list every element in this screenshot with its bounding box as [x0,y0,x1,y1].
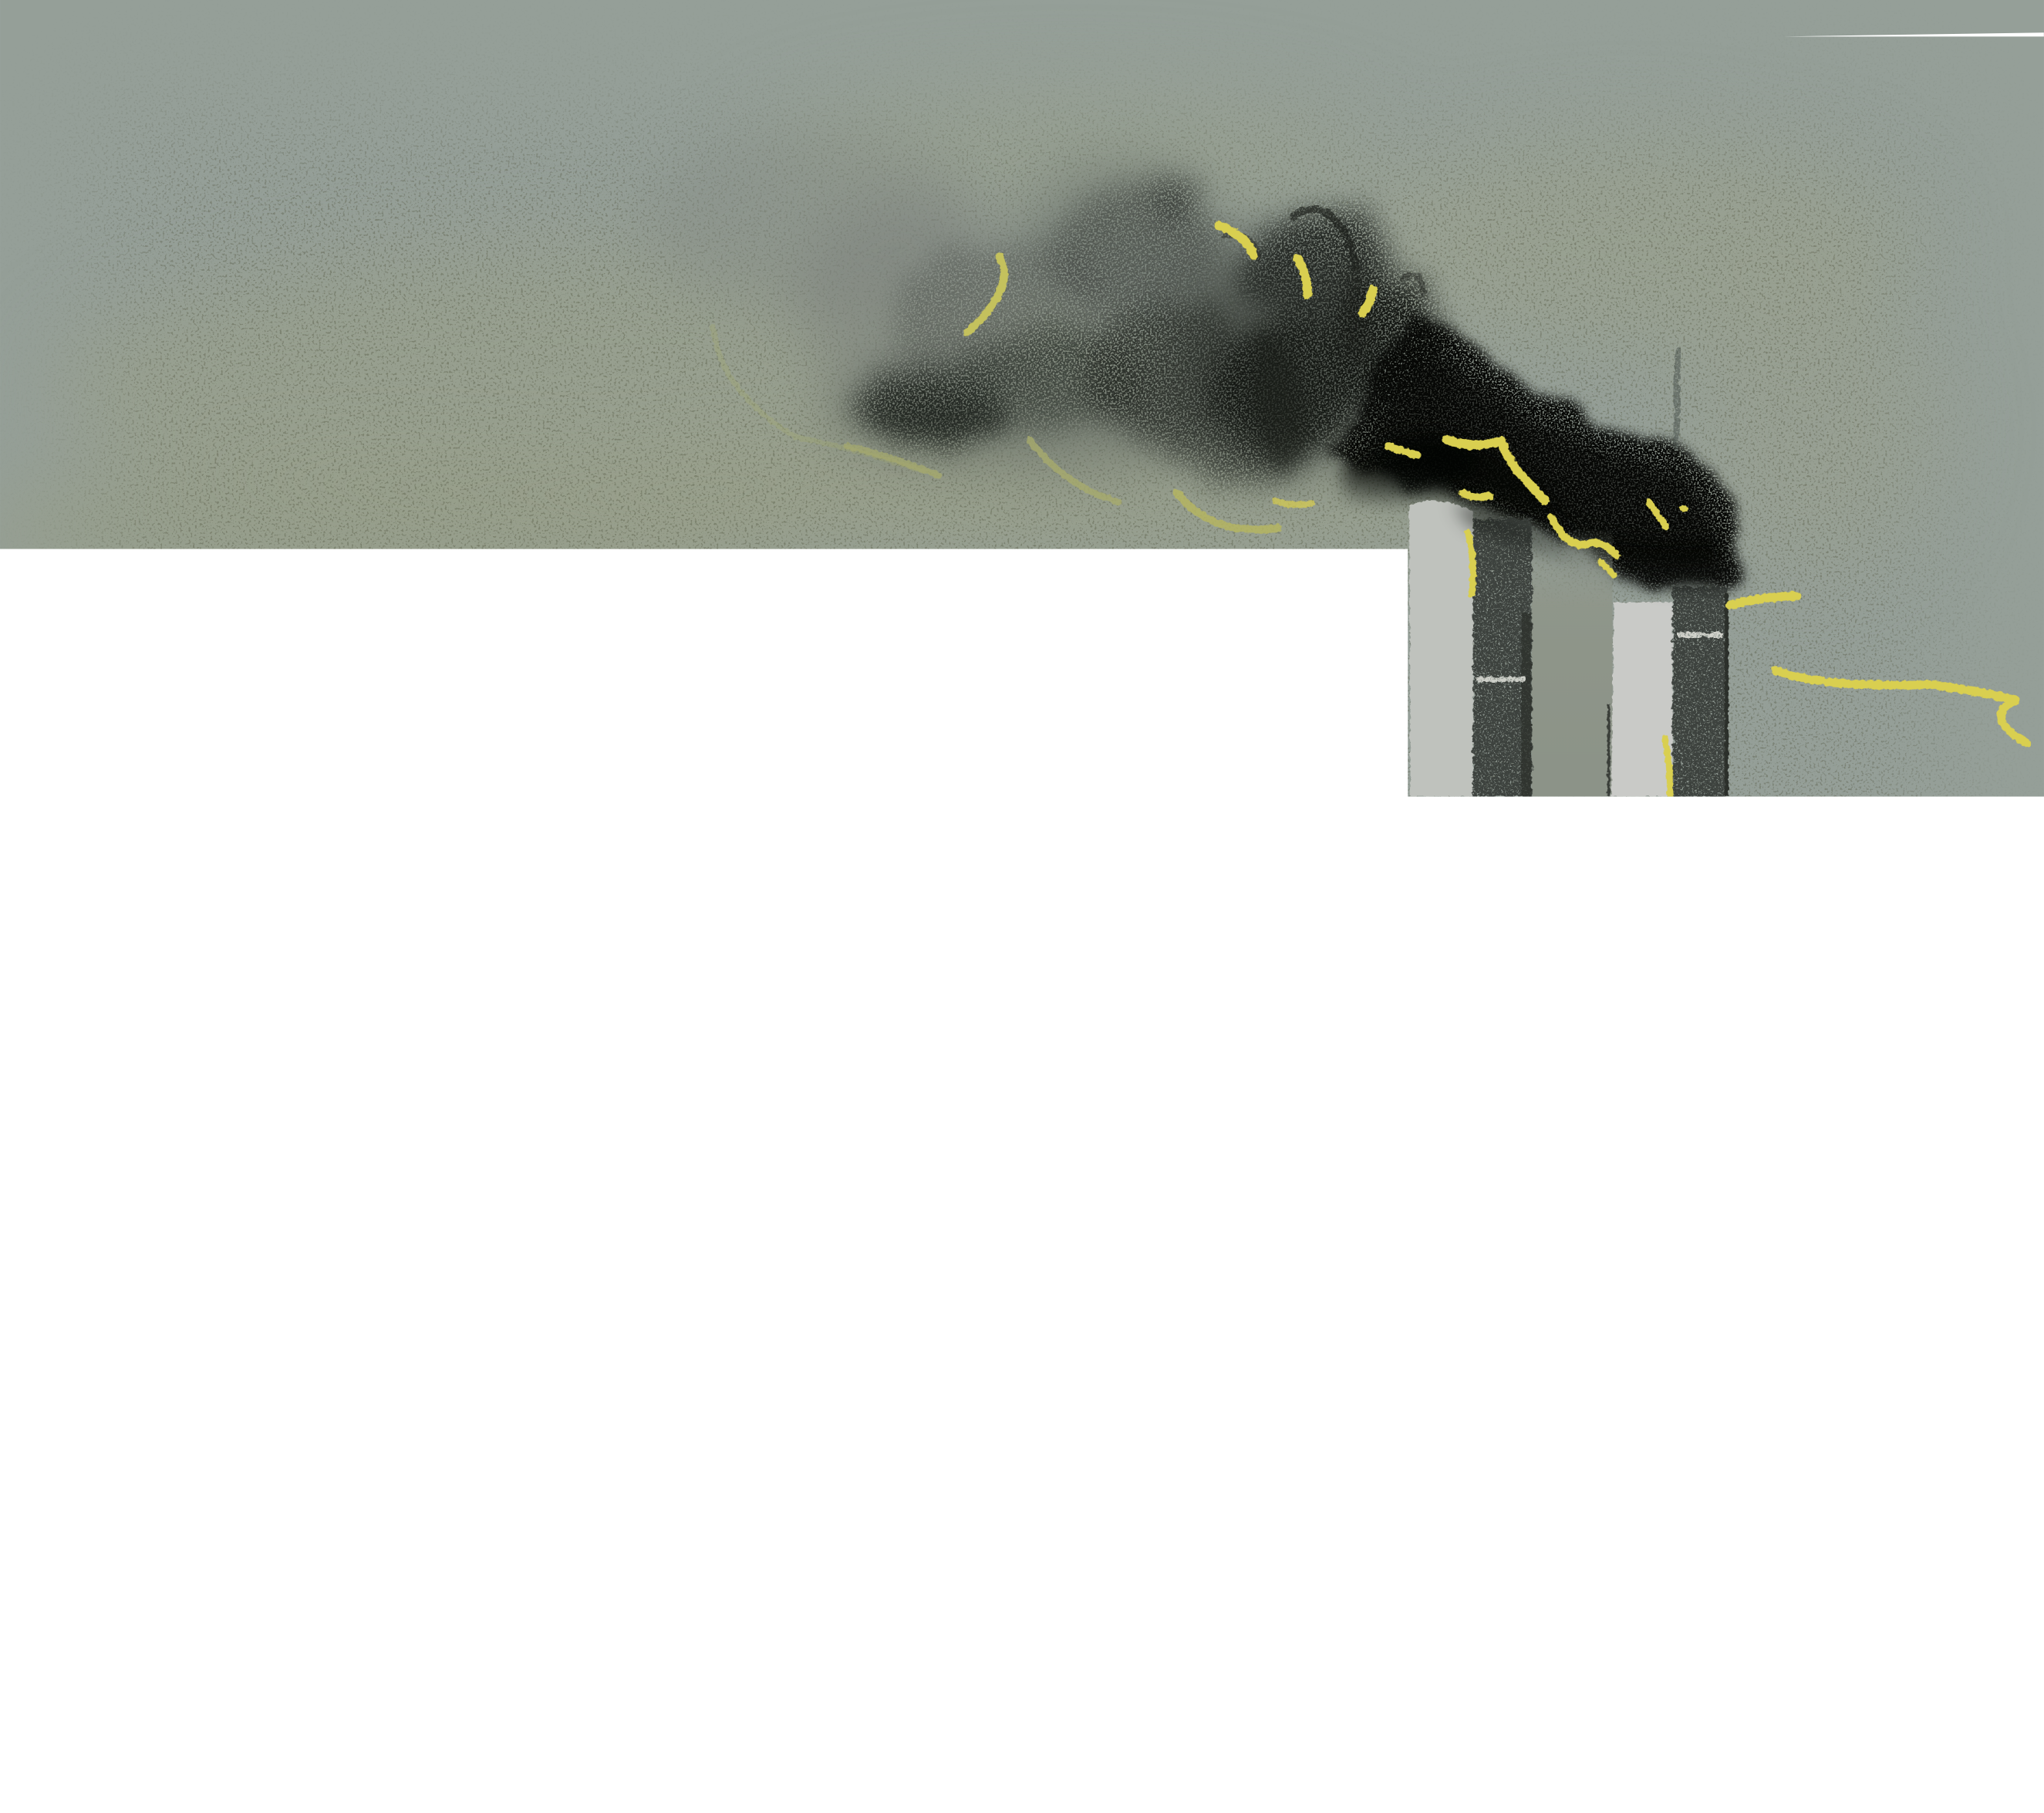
faded yellow strokes in the haze [713,326,1277,529]
grey smoke cloud [848,167,1447,482]
illustration: smoke rising from twin towers [0,0,2044,797]
left tower shadow face [1473,519,1532,797]
right tower lit face [1611,603,1672,797]
mist between towers [1532,528,1613,797]
solid black plume core [1343,430,1727,578]
paper speckle texture [91,117,1942,900]
right tower window band [1678,633,1723,637]
left tower [1409,501,1532,797]
white streak at top right [1783,32,2044,36]
left tower window band [1476,677,1525,682]
background panel [0,0,2044,797]
right tower shadow face [1672,587,1727,797]
smoke base over towers [1453,502,1740,586]
bright yellow strokes [967,225,2027,797]
right tower [1607,587,1729,797]
dark smoke shading [867,261,1368,476]
left tower lit face [1409,501,1473,797]
grey smoke underlay [639,130,1395,465]
yellow chalk lines [713,225,2027,797]
black smoke plume [1330,319,1741,586]
olive haze behind the smoke [0,299,1408,561]
smoke curls at crest [1226,210,1424,295]
antenna on right tower [1674,347,1680,450]
black plume underlay [1369,359,1719,566]
